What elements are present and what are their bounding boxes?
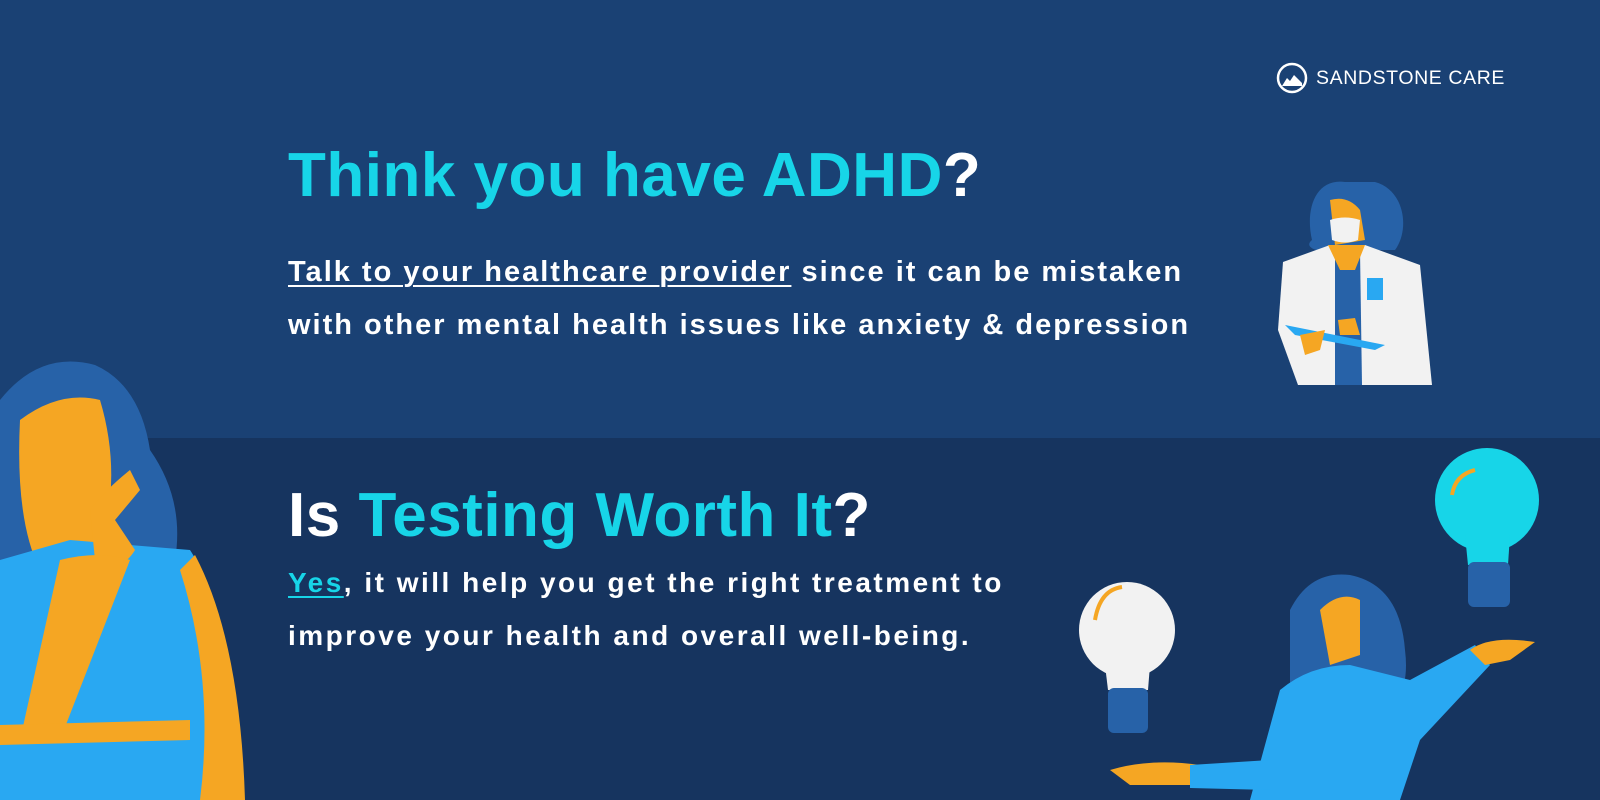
title 1: Think you have ADHD? [288,141,981,210]
logo: SANDSTONE CARE [1316,67,1505,89]
text block 2: improve your health and overall well-being. [288,620,971,651]
title 2: Is Testing Worth It? [288,481,871,550]
illustration: thinking woman [0,362,245,800]
text block 1: Talk to your healthcare provider since it can be mistaken [288,256,1183,288]
text block 2: Yes, it will help you get the right treatment to [288,567,1004,598]
illustration: light bulbs and woman [1079,448,1539,800]
text block 2 [288,567,1004,651]
text block 1: with other mental health issues like anxiety & depression [288,309,1190,341]
text block 1 [288,256,1190,341]
logo [1276,62,1505,94]
